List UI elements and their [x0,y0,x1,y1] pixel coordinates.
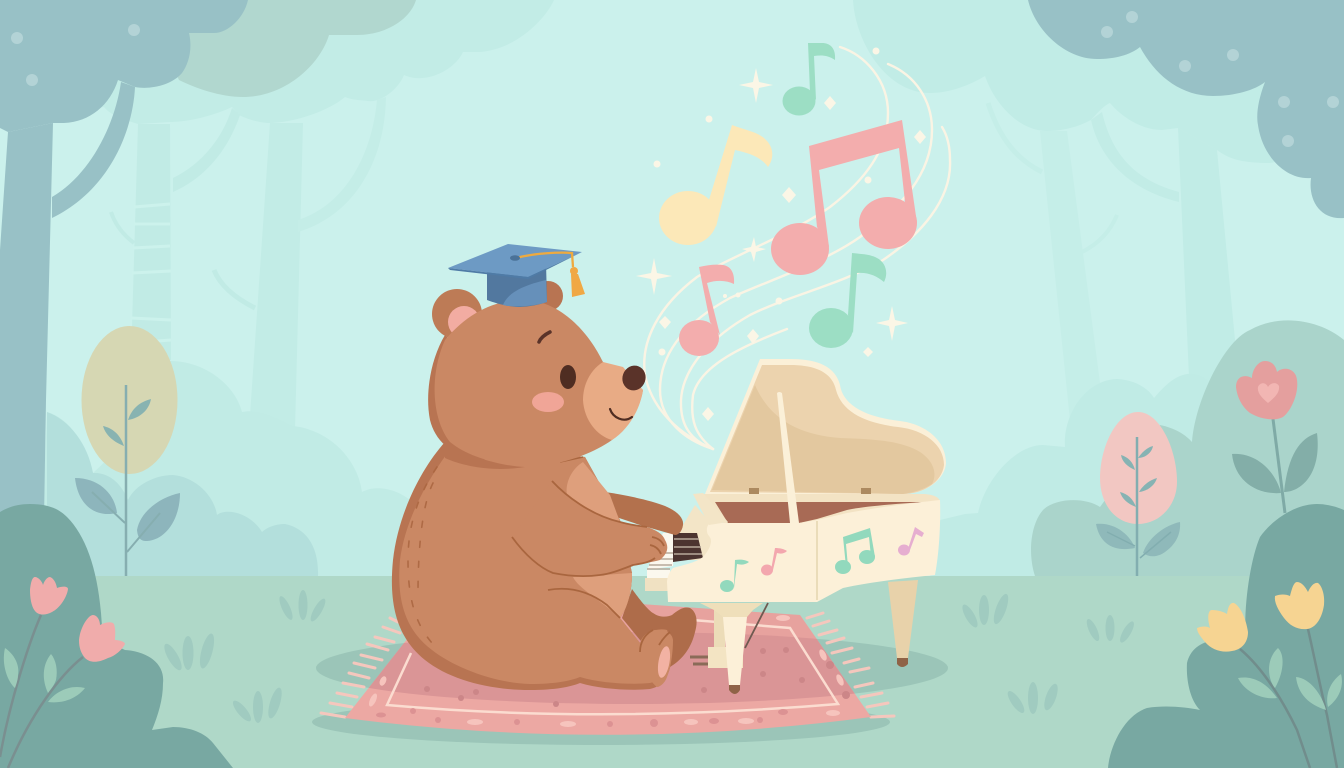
background bushes left [40,361,430,576]
foreground tree left [0,0,248,520]
music note: yellow [659,125,772,245]
keyboard [645,505,712,591]
case notes [720,527,924,592]
muzzle [583,362,643,440]
flowers right [1197,582,1342,768]
ground [0,576,1344,768]
arm lines [512,481,664,618]
far arm [605,492,683,535]
bear body [392,442,672,690]
left ear [432,289,482,339]
olive sapling [75,326,180,576]
grass tufts [161,590,1136,724]
near arm [512,481,667,576]
flowers left [0,577,125,768]
pink rug [345,604,871,735]
piano cheek [693,493,728,525]
foreground bush left [0,504,233,768]
foreground tree right [1028,0,1344,218]
red tulip [1232,361,1318,513]
cheek [532,392,564,412]
foreground bush right [1108,504,1344,768]
sparkles and dots [636,48,926,421]
lid prop [777,392,799,523]
rug fringe [321,613,894,717]
ground shadows [312,632,948,745]
piano lid [705,359,946,494]
head shading [428,335,500,462]
swirling music lines [644,47,950,449]
smile [610,409,632,420]
grand piano [645,359,946,694]
background bushes right [930,320,1344,576]
piano rim and interior [700,494,940,525]
body inner fill [399,447,668,684]
pink sapling [1096,412,1180,576]
music note: green top [782,43,835,116]
chest patch [567,462,620,522]
olive canopy left [160,0,416,97]
piano legs [690,603,768,694]
stitched fur [408,380,495,643]
nose [619,362,649,394]
bear head [435,300,643,466]
right ear [533,281,563,311]
eye [560,365,576,389]
music note: small pink [679,265,734,356]
eyebrow [539,332,550,342]
far leg [622,589,697,667]
music note: green lower [809,253,886,348]
piano case [667,500,940,602]
lid hinges [749,488,871,504]
belly patch [573,573,632,618]
music note: big pink pair [771,120,917,275]
graduation cap [448,244,585,307]
bear [392,281,697,690]
distant forest trees [0,0,1344,430]
near foot [640,630,673,687]
collar shadow [445,440,525,469]
